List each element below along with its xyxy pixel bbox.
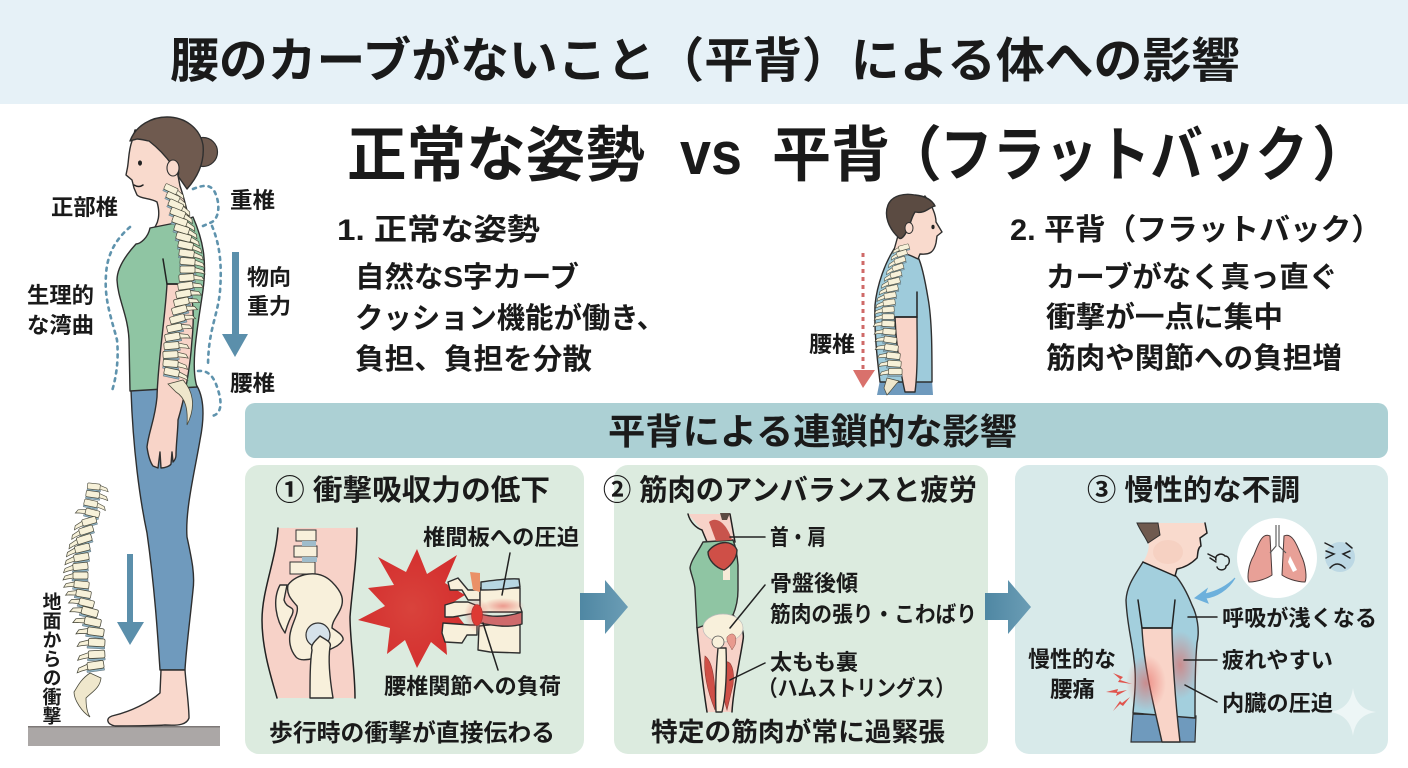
panel 3: chronic discomfort [1015,465,1388,754]
sparkle [1330,688,1376,736]
arrow: panel 1 to 2 [580,580,628,634]
green shirt [117,217,205,391]
sleeve line [163,259,177,284]
panel 2: muscle imbalance [603,465,988,754]
label: shallow breathing: 呼吸が浅くなる [1222,606,1377,631]
subtitle: 正常な姿勢 [347,122,645,189]
leaders [730,537,765,680]
ear and eye [905,222,935,234]
text: normal details: 負担、負担を分散 [355,343,592,376]
leggings [131,386,203,670]
label: physiological curve: 生理的 [27,283,94,308]
subtitle: vs [680,120,742,187]
label: hamstrings: 太もも裏 [770,650,858,675]
title: 腰のカーブがないこと（平背）による体への影響 [170,35,1240,88]
label: chronic back pain: 腰痛 [1050,677,1095,702]
banner [245,403,1388,458]
icon: pain lightning [1106,673,1132,711]
man illustration [1126,523,1207,742]
section: flat back text [1010,214,1382,375]
label: chronic back pain [1028,647,1116,702]
foot [108,670,189,726]
label: lumbar: 腰椎 [230,371,275,396]
label: physiological curve: な湾曲 [27,313,94,338]
pants [877,380,933,395]
heading: normal: 1. 正常な姿勢 [337,214,540,247]
panel 1 caption: 歩行時の衝撃が直接伝わる [269,719,555,747]
label: gravity direction: 重力 [247,294,291,319]
label: heavy vertebra: 重椎 [230,188,275,213]
hair [886,194,935,239]
banner heading: 平背による連鎖的な影響 [608,411,1017,452]
text: flat back details: 衝撃が一点に集中 [1046,300,1283,334]
label: pelvis tilt: 骨盤後傾 [770,571,858,596]
label: lumbar: 腰椎 [809,332,855,357]
panel 2 heading: ② 筋肉のアンバランスと疲労 [603,474,977,507]
figure: flat back man [809,194,942,395]
arrow: breath [1195,578,1235,603]
label: disc pressure: 椎間板への圧迫 [423,525,579,550]
sad face icon [1325,542,1355,572]
header band [0,0,1408,104]
arrow: ground impact [117,554,144,645]
burst [358,549,465,668]
arm [895,317,917,392]
eye and smile [134,160,143,186]
label: fatigue: 疲れやすい [1222,648,1333,673]
ground [28,726,220,746]
spine [873,244,910,395]
label: neck shoulder: 首・肩 [770,525,826,550]
label: organ pressure: 内臓の圧迫 [1222,691,1333,716]
section: normal posture text [337,214,665,376]
panel 3 heading: ③ 慢性的な不調 [1087,474,1300,507]
breath puff [1208,554,1229,570]
ear [167,160,179,176]
panel 2 caption: 特定の筋肉が常に過緊張 [651,717,945,747]
text: flat back details [1046,260,1342,375]
bun [188,138,218,166]
label: chronic back pain: 慢性的な [1028,647,1116,672]
label: hamstrings [758,650,955,701]
label: neck: 正部椎 [51,195,118,220]
leaders [1184,617,1217,702]
subtitle: フラットバック [940,122,1308,189]
spine in body [163,183,205,425]
text: normal details: クッション機能が働き、 [355,301,665,335]
leaders [483,553,510,670]
standalone spine [63,483,109,717]
hair [130,117,203,189]
subtitle [347,120,1372,189]
label: hamstrings: （ハムストリングス） [758,676,955,701]
vertebra illustration [442,572,525,653]
text: normal details: 自然なS字カーブ [355,260,579,294]
label: gravity direction: 物向 [247,265,291,290]
arrow: gravity [222,252,248,357]
dotted red arrow [853,253,875,388]
hip illustration [262,528,357,698]
panel 1: reduced shock absorption [245,465,584,754]
subtitle: 平背 [772,122,890,189]
arrow: panel 2 to 3 [985,580,1031,634]
label: physiological curve [27,283,94,338]
text: flat back details: 筋肉や関節への負担増 [1046,342,1342,375]
label: ground impact: 地面からの衝撃 [40,592,61,725]
lung icon [1237,518,1317,598]
subtitle: ） [1312,122,1372,189]
text: normal details [355,260,665,376]
panel 1 heading: ① 衝撃吸収力の低下 [275,474,550,507]
shirt [875,246,932,382]
figure: woman normal posture [27,117,291,746]
dotted curve lines [106,186,221,416]
muscle illustration [688,513,743,712]
arm [147,284,193,468]
label: gravity direction [247,265,291,319]
neck and face [894,196,942,259]
heading: flat back: 2. 平背（フラットバック） [1010,214,1382,247]
text: flat back details: カーブがなく真っ直ぐ [1046,260,1338,294]
label: muscle stiffness: 筋肉の張り・こわばり [770,602,977,627]
head and neck skin [126,130,192,232]
subtitle: （ [882,122,942,189]
label: lumbar joint load: 腰椎関節への負荷 [384,674,561,699]
sleeve [896,292,917,317]
